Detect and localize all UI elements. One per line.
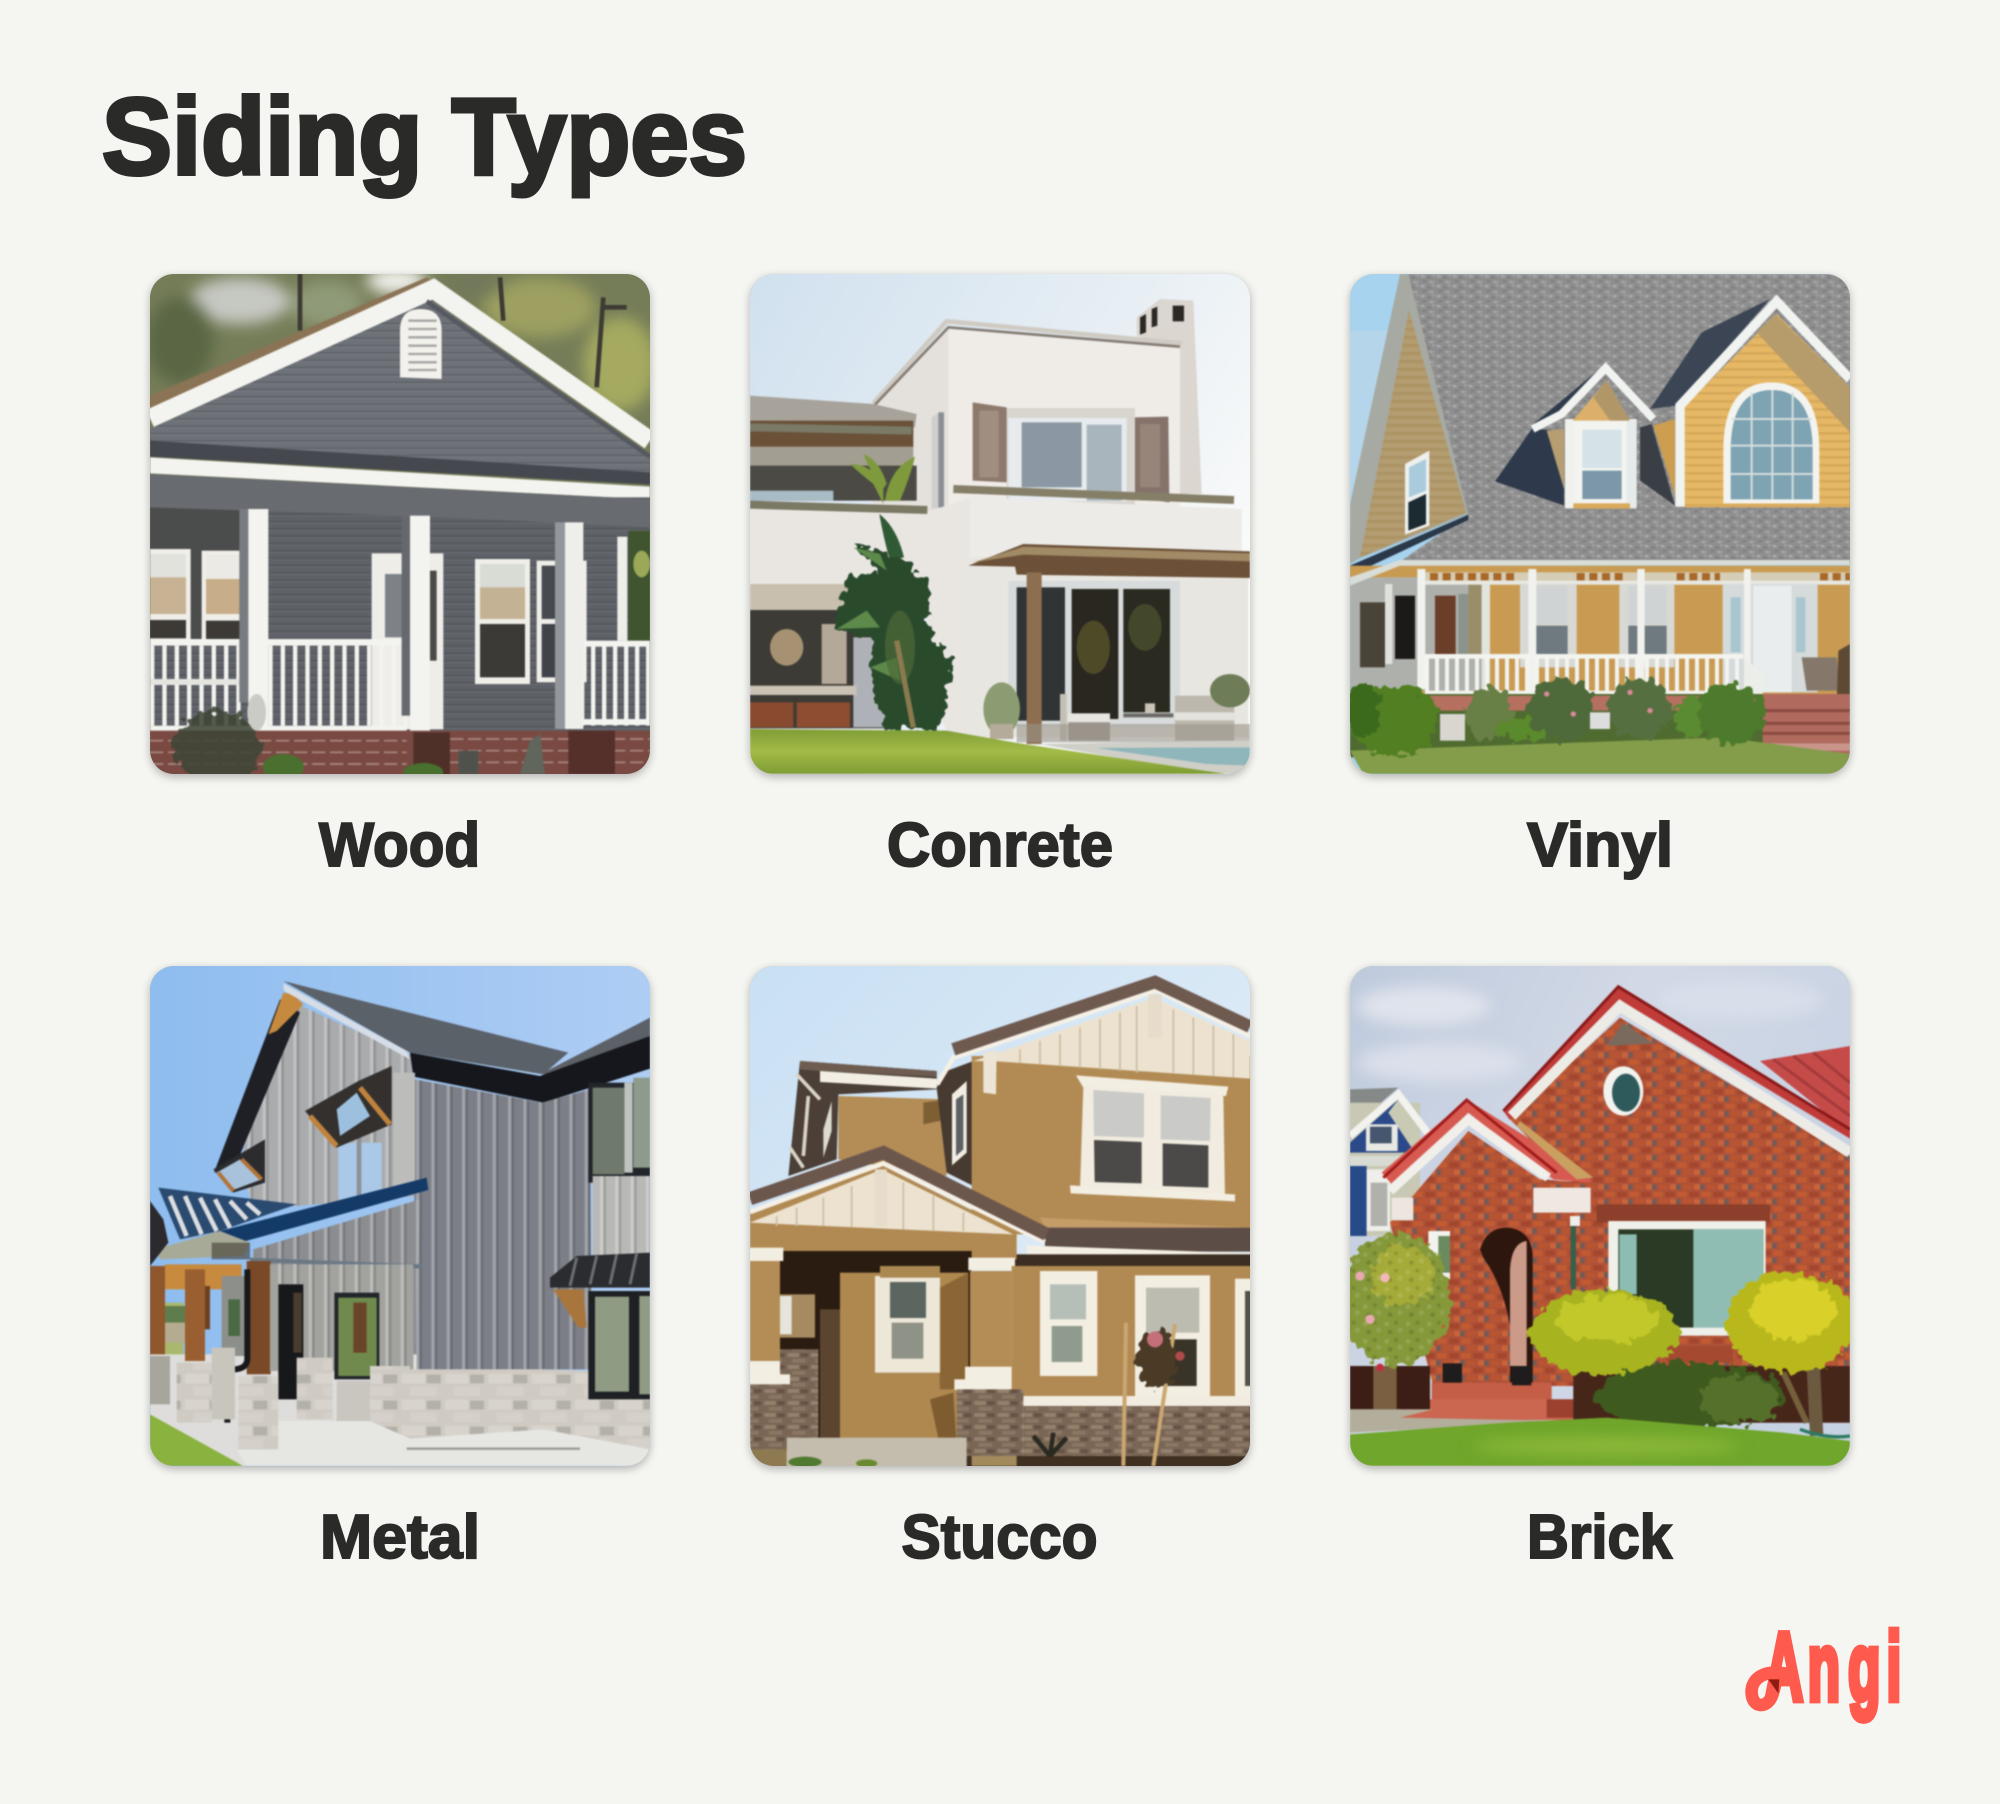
title: Siding Types [102,76,747,198]
dormer [1495,367,1675,509]
photo: gray wood-sided house with porch [150,274,650,774]
photo: yellow vinyl house with gray roof [1350,274,1850,774]
porch columns [239,509,583,736]
neighbor house [1350,1088,1430,1236]
porch railings [150,639,650,732]
main metal wall [393,1073,650,1369]
label: Stucco: Stucco [902,1503,1098,1572]
left gable [1350,274,1468,576]
label: Conrete: Conrete [887,811,1113,880]
upper window and shutters [973,402,1169,505]
walkway and plantings [750,1323,1252,1468]
photo: gray metal-sided building [150,966,650,1466]
terrace furniture and planter [983,674,1250,742]
lower right wall with doors [927,497,1248,741]
lower right wall and windows [957,1266,1252,1456]
foundation shrubs [1347,677,1763,756]
right awning and door [550,1253,650,1399]
porch [1350,560,1850,704]
label: Metal: Metal [320,1503,480,1572]
lawn and pool [750,729,1250,774]
shrubs [1340,1233,1854,1437]
banana plant [835,454,953,729]
porch recess [750,1248,1026,1451]
photo: white concrete house with pergola [750,274,1250,774]
lower front gable [750,1153,1047,1259]
label: Vinyl: Vinyl [1527,811,1673,880]
mid roof and blue beam [155,1178,428,1369]
photo: tan stucco house [750,966,1250,1466]
panel: brick siding [1345,964,1855,1572]
panel: metal siding [145,964,655,1572]
shrubs and statue [173,694,545,784]
upper storey [788,982,1252,1234]
logo: Angi: Angi [1765,1612,1901,1721]
panel: vinyl siding [1345,272,1855,880]
lawn [1350,1409,1850,1466]
porch gable and arch [1382,1099,1593,1386]
label: Wood: Wood [319,811,480,880]
entry steps and pots [1401,1363,1584,1420]
panel: concrete siding [745,272,1255,880]
picture window [1597,1204,1770,1363]
gable wall [213,993,415,1209]
concrete patio and grass [150,1406,650,1466]
windows and door [150,537,627,729]
label: Brick: Brick [1527,1503,1672,1572]
large gable with arched window [1650,299,1850,507]
panel: wood siding [145,272,655,880]
panel: stucco siding [745,964,1255,1572]
lawn [1350,737,1850,774]
photo: red brick house [1350,966,1850,1466]
timber posts and entry [150,1201,650,1466]
stone base [150,1348,650,1454]
main gable [1503,985,1850,1423]
upper double window [1070,1075,1235,1201]
main roof [283,981,650,1103]
pergola [968,544,1250,744]
steps [1350,694,1850,757]
left veranda [750,396,928,728]
